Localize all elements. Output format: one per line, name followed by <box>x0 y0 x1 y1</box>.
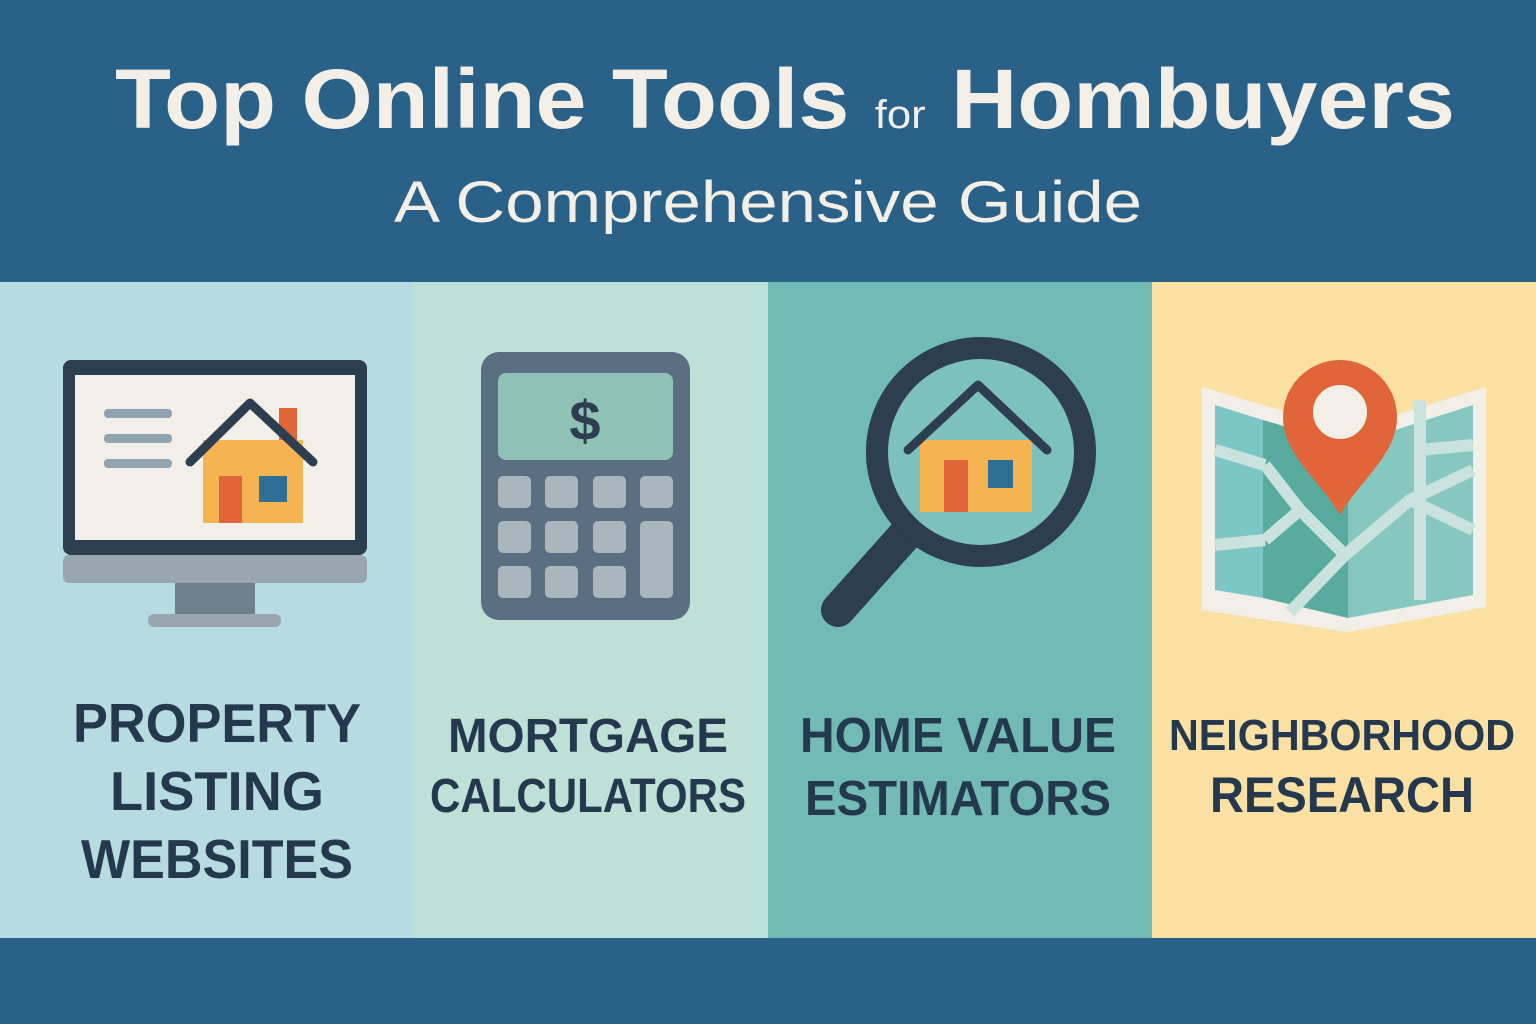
footer <box>0 938 1536 1024</box>
panel: property listing websites: LISTING <box>110 760 324 822</box>
icon: map with pin <box>1202 360 1486 632</box>
icon: calculator <box>481 352 690 620</box>
label: neighborhood research: NEIGHBORHOOD <box>1169 711 1515 760</box>
subtitle: A Comprehensive Guide <box>394 170 1142 235</box>
icon: magnifier with house <box>838 348 1085 610</box>
label: mortgage calculators: MORTGAGE <box>448 710 728 763</box>
label: property listing websites: PROPERTY <box>73 692 361 754</box>
label: home value estimators: HOME VALUE <box>800 709 1116 763</box>
panel: property listing websites: WEBSITES <box>81 828 353 890</box>
panel: home value estimators: ESTIMATORS <box>805 772 1111 826</box>
panel: property listing websites <box>0 282 412 938</box>
panel: home value estimators <box>768 282 1152 938</box>
panel: neighborhood research: RESEARCH <box>1210 767 1474 823</box>
header <box>0 0 1536 282</box>
panel: mortgage calculators <box>412 282 768 938</box>
panel: mortgage calculators: CALCULATORS <box>430 770 746 823</box>
title: Top Online Tools for Hombuyers <box>115 52 1455 146</box>
icon: monitor <box>63 360 367 627</box>
panel: neighborhood research <box>1152 282 1536 938</box>
icon: calculator: $ <box>569 389 601 452</box>
